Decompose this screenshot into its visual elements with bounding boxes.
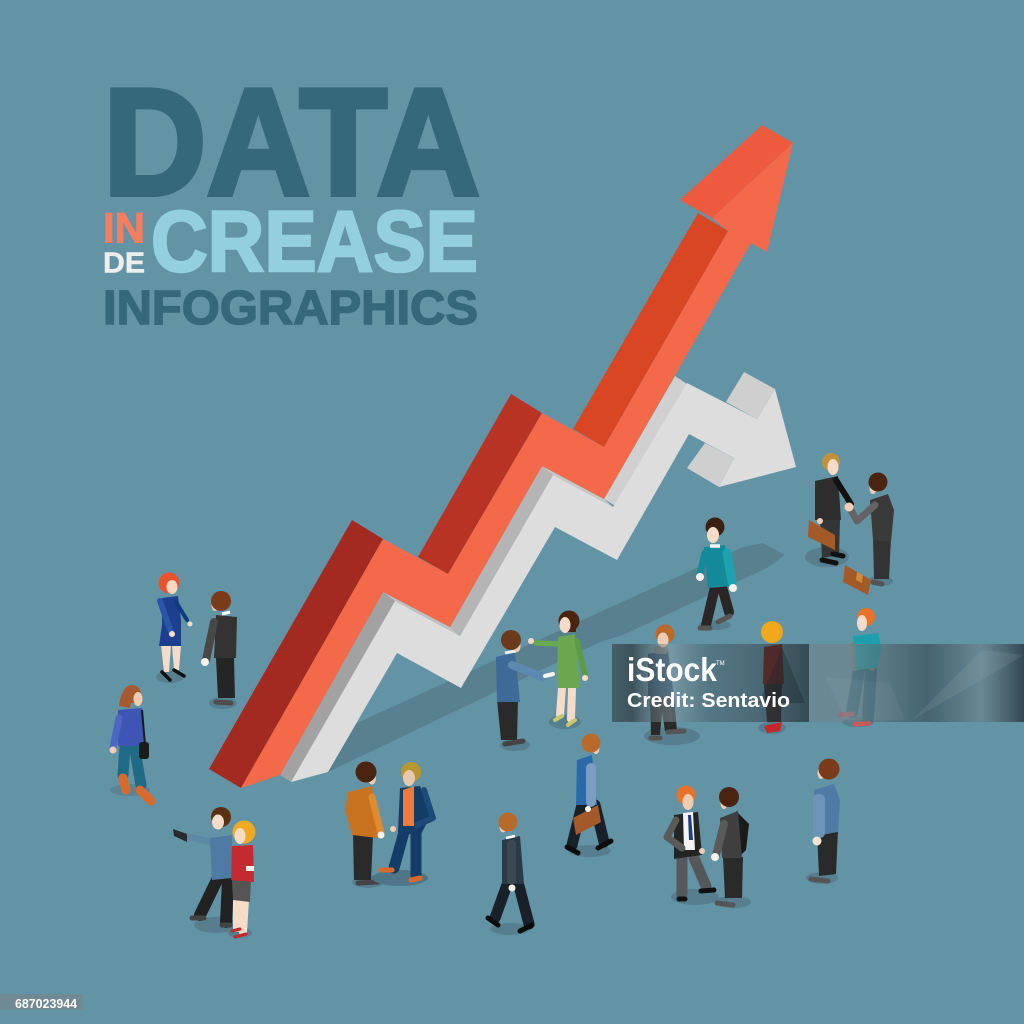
person: orange-haired man in teal t-shirt <box>840 608 882 727</box>
person: man in dark suit shaking hands <box>844 472 894 586</box>
title: DATA <box>103 58 480 228</box>
person: yellow-haired woman in maroon top <box>758 621 786 734</box>
shadow of arrows <box>328 543 785 772</box>
person: man in dark suit, top left <box>201 591 237 709</box>
person: blonde businessman with briefcase shaking hands <box>805 453 851 567</box>
person: man taking a selfie <box>173 807 238 933</box>
person: man walking in navy jacket <box>488 812 532 935</box>
title: CREASE <box>151 194 478 290</box>
person: man in blue sweater, bottom right <box>806 758 840 884</box>
chart: falling white arrow <box>280 372 796 782</box>
watermark banner <box>612 644 1024 722</box>
person: blonde woman in red top <box>228 820 256 938</box>
watermark logo text: TM <box>716 661 725 667</box>
person: man walking in teal sweater <box>696 518 737 630</box>
watermark logo text: Credit: Sentavio <box>627 690 790 712</box>
title <box>103 58 480 335</box>
person: woman in blue dress <box>156 572 192 683</box>
watermark logo text <box>627 651 790 712</box>
people <box>110 453 894 938</box>
person: man in navy with grey scarf <box>644 624 700 745</box>
image id tag <box>0 994 83 1011</box>
title: DE <box>103 248 145 280</box>
title: IN <box>103 204 145 252</box>
person: orange-haired man in suit <box>667 786 719 905</box>
title: INFOGRAPHICS <box>103 282 478 335</box>
person: man in dark suit seen from behind <box>711 787 751 908</box>
person: man walking with briefcase <box>567 734 611 857</box>
person: man in blue pointing <box>496 630 553 751</box>
person: blonde man in navy suit <box>372 762 433 886</box>
person: woman walking with shoulder bag <box>110 685 151 801</box>
chart: rising red arrow <box>209 125 793 788</box>
watermark logo text: iStock <box>627 651 718 688</box>
icon: briefcase on the ground <box>843 565 871 595</box>
person: woman in green dress <box>528 610 588 729</box>
person: man in orange sweater <box>345 762 384 888</box>
image id tag: 687023944 <box>15 997 77 1011</box>
